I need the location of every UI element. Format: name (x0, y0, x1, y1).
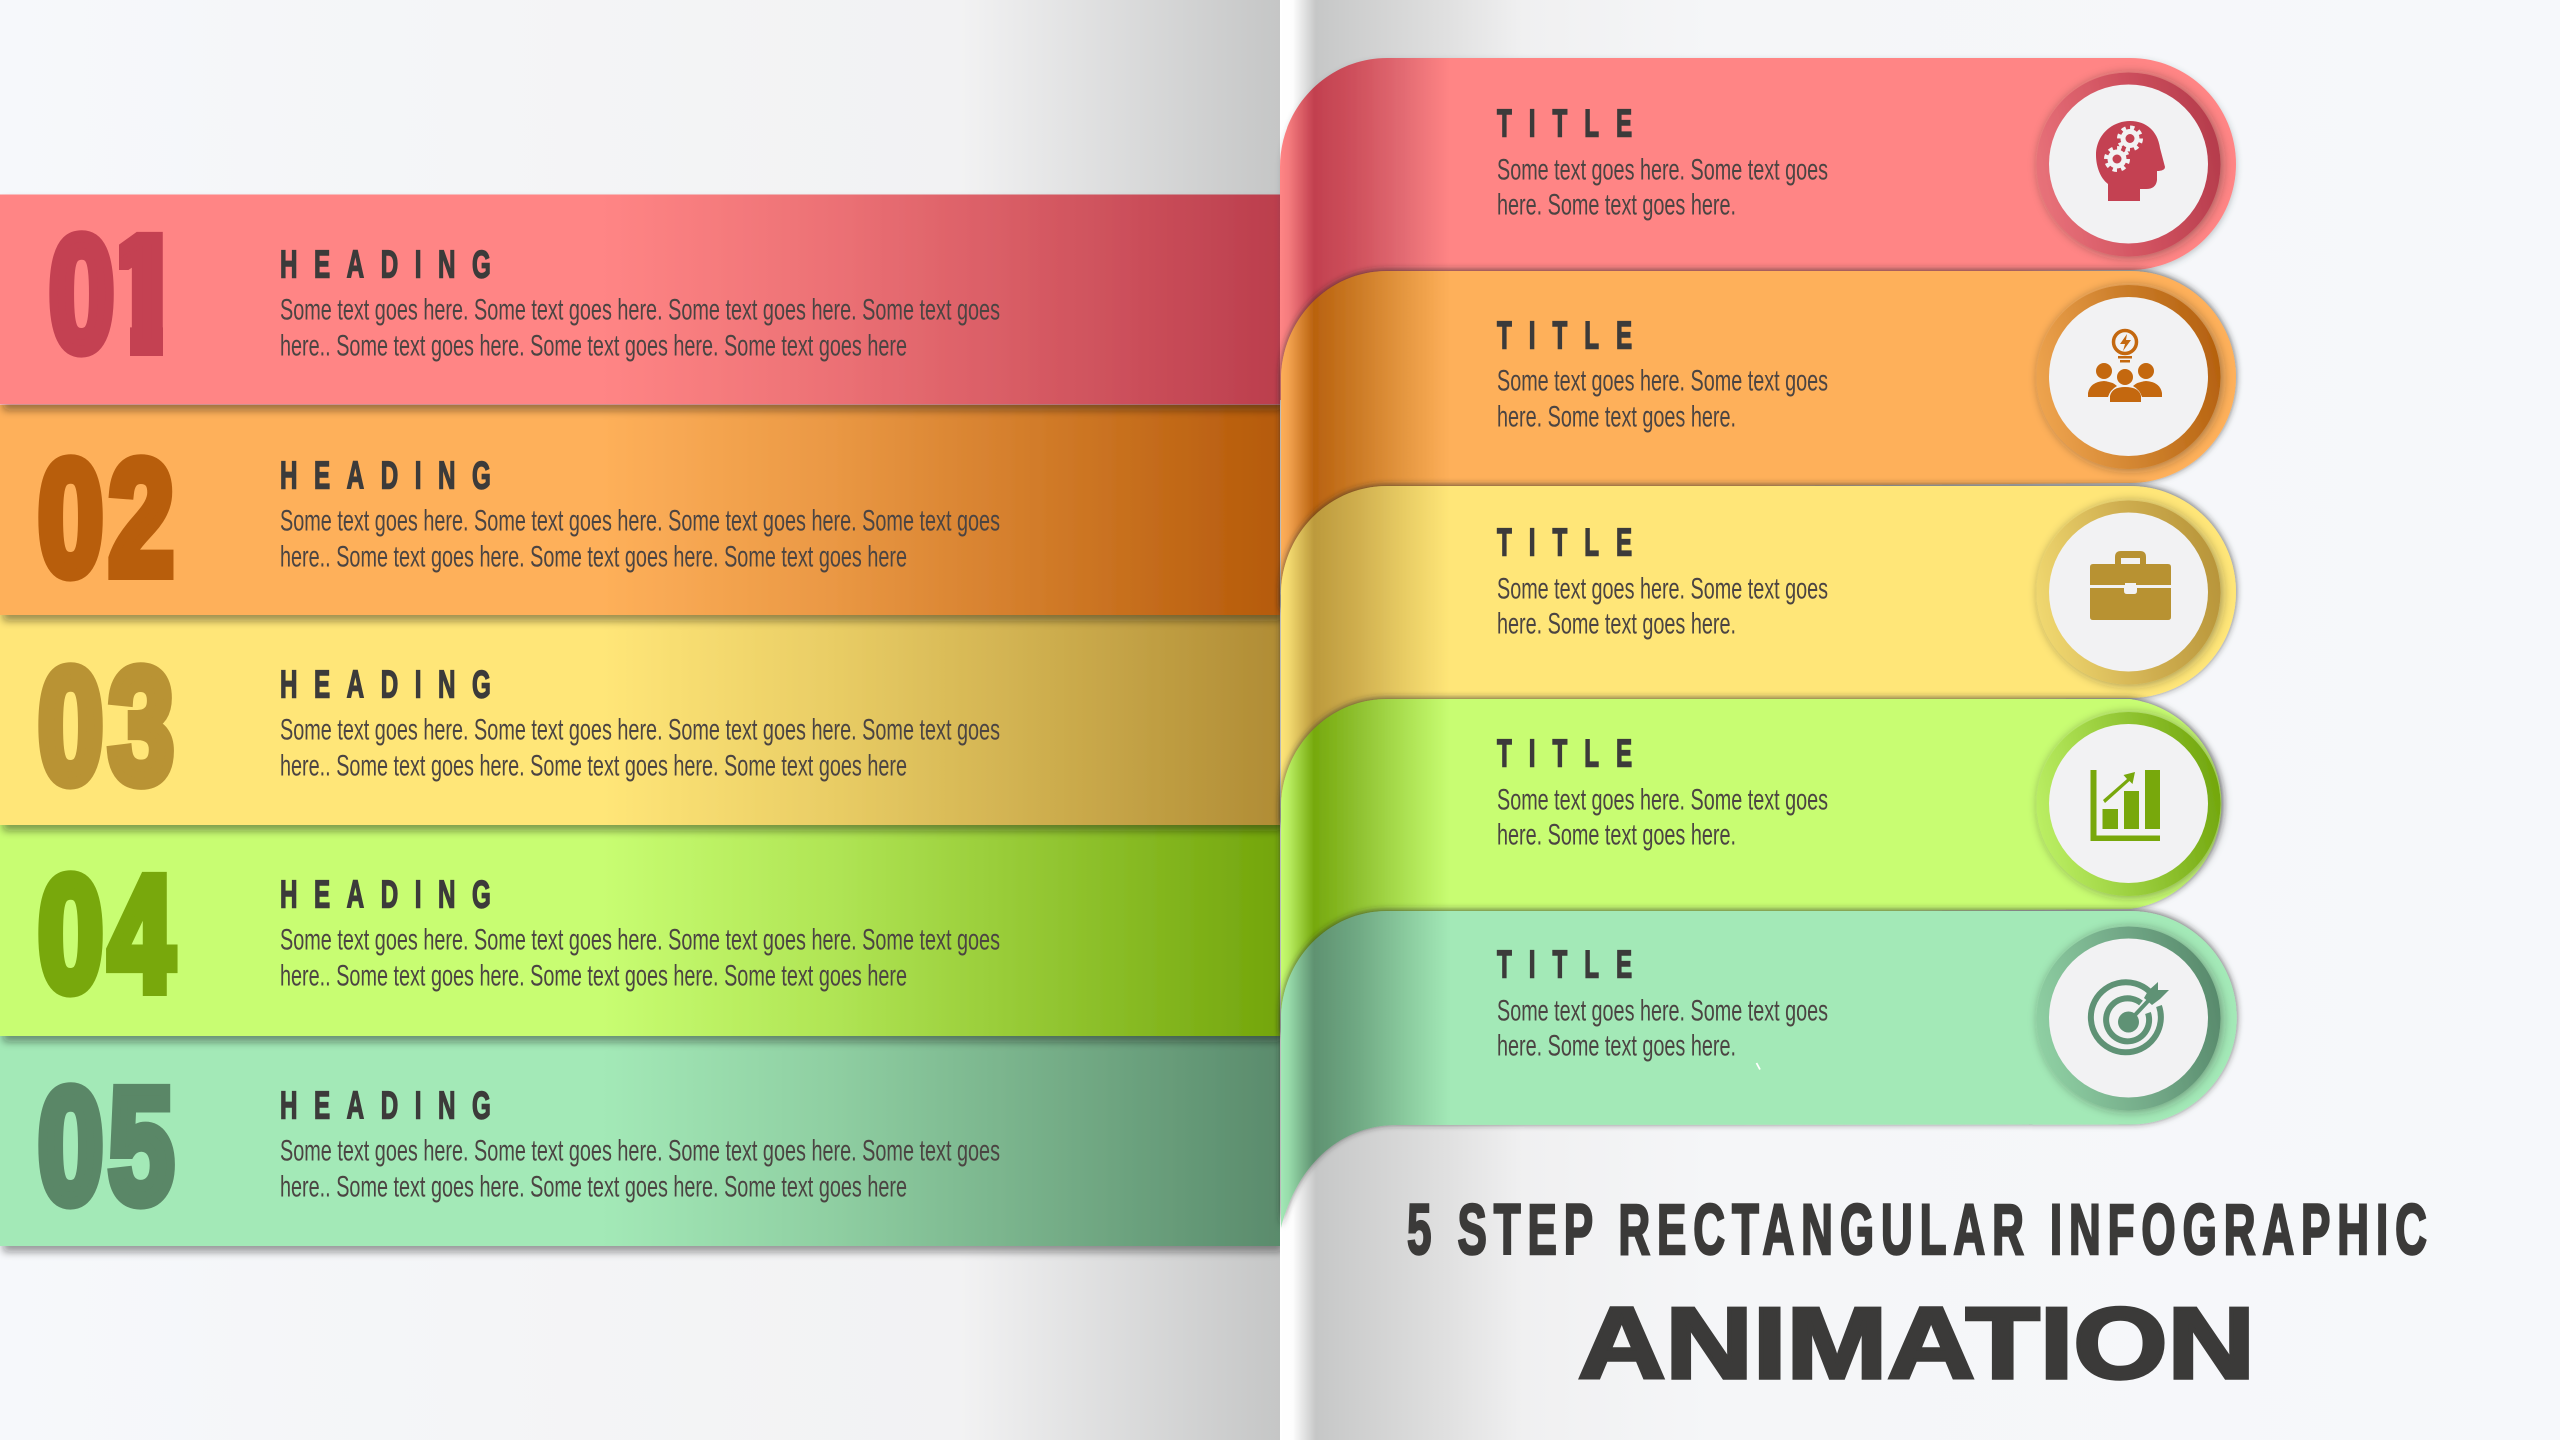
background: left page (0, 0, 1280, 1440)
body text 3: Some text goes here. Some text goes here. Some text goes here. Some text goes (280, 714, 1000, 746)
band 03 (0, 615, 1280, 825)
text 5 (1497, 994, 1828, 1062)
icon: briefcase (2090, 551, 2171, 620)
text 3 (1497, 572, 1828, 640)
ring 4 (2036, 712, 2220, 896)
text 2: Some text goes here. Some text goes (1497, 364, 1828, 398)
text 3: here. Some text goes here. (1497, 608, 1736, 640)
icon: target with arrow (2091, 982, 2169, 1052)
ring 3 (2036, 500, 2220, 684)
body text 1: Some text goes here. Some text goes here. Some text goes here. Some text goes (280, 294, 1000, 326)
heading 3: HEADING (280, 663, 491, 706)
text 1: here. Some text goes here. (1497, 188, 1736, 222)
number 05: 05 (38, 1055, 179, 1238)
body text 3 (280, 714, 1000, 782)
body text 4: Some text goes here. Some text goes here. Some text goes here. Some text goes (280, 924, 1000, 956)
ribbon 5 (1281, 911, 2237, 1228)
ribbon 1 (1280, 58, 2236, 400)
heading 4: HEADING (280, 873, 491, 916)
number 02: 02 (38, 427, 179, 610)
text 5: here. Some text goes here. (1497, 1030, 1736, 1062)
title 5: TITLE (1497, 943, 1632, 986)
number 01: 1 (103, 203, 185, 385)
ribbon 3 (1281, 486, 2236, 825)
band 01 (0, 194, 1280, 404)
ribbon 2 (1281, 271, 2236, 610)
text 1: Some text goes here. Some text goes (1497, 154, 1828, 186)
body text 4: here.. Some text goes here. Some text goes here. Some text goes here (280, 960, 907, 992)
icon disc 1 (2049, 84, 2208, 244)
body text 5 (280, 1134, 1000, 1204)
panel: left numbered bands (0, 194, 1280, 1246)
band 05 (0, 1036, 1280, 1246)
ribbon 4 (1281, 699, 2221, 1035)
icon: growth chart (2090, 770, 2160, 841)
text 2: here. Some text goes here. (1497, 400, 1736, 434)
body text 2: Some text goes here. Some text goes here. Some text goes here. Some text goes (280, 504, 1000, 538)
icon disc 5 (2049, 938, 2208, 1098)
ring 2 (2036, 285, 2220, 469)
body text 2: here.. Some text goes here. Some text goes here. Some text goes here (280, 540, 907, 574)
title line 2: ANIMATION (1578, 1288, 2255, 1400)
heading 5: HEADING (280, 1084, 491, 1127)
ring 1 (2036, 72, 2220, 256)
title 4: TITLE (1497, 732, 1632, 775)
icon: head with gears (2096, 121, 2165, 201)
band 02 (0, 405, 1280, 615)
icon: team with idea bulb (2088, 330, 2162, 402)
number 01 (49, 230, 163, 358)
band 04 (0, 825, 1280, 1036)
heading 2: HEADING (280, 454, 491, 497)
body text 1: here.. Some text goes here. Some text goes here. Some text goes here (280, 330, 907, 362)
number 03: 03 (38, 635, 179, 818)
icon disc 2 (2049, 297, 2208, 456)
number 04: 04 (38, 843, 179, 1026)
title line 1: 5 STEP RECTANGULAR INFOGRAPHIC (1407, 1190, 2427, 1270)
text 4: here. Some text goes here. (1497, 818, 1736, 852)
body text 3: here.. Some text goes here. Some text goes here. Some text goes here (280, 750, 907, 782)
heading 1: HEADING (280, 243, 491, 286)
icon disc 3 (2049, 512, 2208, 672)
ring 5 (2036, 926, 2220, 1110)
main title (1407, 1190, 2427, 1400)
background: right page (1280, 0, 2560, 1440)
text 4: Some text goes here. Some text goes (1497, 784, 1828, 816)
title 2: TITLE (1497, 314, 1632, 357)
number 01: 0 (49, 203, 114, 386)
panel: right ribbons (1280, 58, 2237, 1228)
title 1: TITLE (1497, 102, 1632, 145)
body text 5: here.. Some text goes here. Some text goes here. Some text goes here (280, 1170, 907, 1204)
body text 2 (280, 504, 1000, 574)
icon disc 4 (2049, 724, 2208, 883)
text 1 (1497, 154, 1828, 222)
body text 4 (280, 924, 1000, 992)
small white tick (1756, 1063, 1760, 1070)
title 3: TITLE (1497, 521, 1632, 564)
text 5: Some text goes here. Some text goes (1497, 994, 1828, 1028)
text 2 (1497, 364, 1828, 434)
text 3: Some text goes here. Some text goes (1497, 572, 1828, 606)
body text 5: Some text goes here. Some text goes here. Some text goes here. Some text goes (280, 1134, 1000, 1168)
body text 1 (280, 294, 1000, 362)
text 4 (1497, 784, 1828, 852)
